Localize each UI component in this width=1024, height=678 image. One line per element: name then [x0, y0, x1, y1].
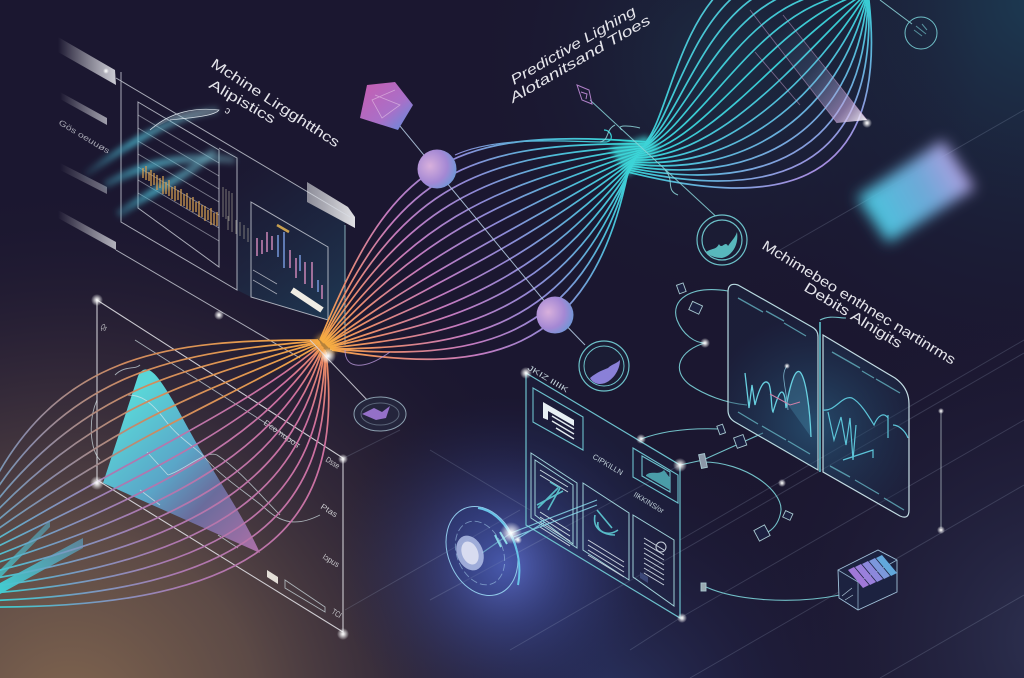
heading: machine analytics [206, 55, 343, 150]
panel: twin monitor screens [728, 284, 941, 528]
icon: server box [838, 550, 897, 610]
panel frames [116, 72, 350, 358]
cube captions: JKIZ IIIIK [526, 363, 570, 394]
cube captions: IIKKINS/or [632, 490, 666, 515]
orange candlestick chart [143, 166, 217, 226]
heading: data algorithms: Mchimebeo enthnec nartinrms [759, 237, 959, 368]
lower card three [633, 515, 674, 606]
cube captions [526, 363, 666, 515]
panel: isometric dashboard cube [526, 363, 680, 618]
right screen [823, 335, 909, 517]
vertical axis line [940, 411, 942, 528]
white legend swatch [267, 570, 278, 584]
heading: predictive lighting [505, 3, 653, 106]
panel: lower-left chart screen [91, 300, 343, 632]
panel annotations: Qs [99, 322, 109, 333]
glowing junction dots [90, 68, 945, 640]
circuit connectors [641, 290, 846, 600]
node spheres [418, 150, 574, 334]
cube captions: CIPKILLN [591, 452, 625, 477]
tinted right screen [237, 150, 345, 325]
icon: teal chart ring [697, 215, 747, 265]
top-left card [533, 388, 583, 450]
knot glows [315, 136, 660, 356]
screen divider [819, 322, 821, 472]
heading: predictive lighting: Alotanitsand Tloes [505, 12, 653, 106]
ellipse highlight [150, 109, 219, 130]
icon: purple disc [354, 397, 406, 431]
lower card one [531, 453, 577, 548]
small connector chips [676, 283, 793, 591]
small rotated caption: Gös oeuuøs [57, 118, 111, 156]
panel annotations: Dsse [324, 455, 342, 471]
right waveform [823, 398, 908, 460]
icon: top-right ring [905, 17, 937, 49]
header dashes [738, 298, 904, 510]
icon: purple chart ring [579, 341, 629, 391]
panel annotations [99, 322, 343, 620]
teal area chart [103, 369, 260, 553]
inner chart curves [91, 340, 325, 612]
panel annotations: Ptas [319, 502, 339, 519]
heading: machine analytics: Alipistics [206, 76, 279, 127]
connector lines and small squiggles [310, 0, 912, 403]
top-right card [633, 448, 678, 503]
wave bundle: central lobe [320, 130, 646, 359]
blurred colour card [857, 140, 975, 243]
heading: machine analytics: Mchine Lirgghtthcs [208, 55, 343, 150]
wave bundle: lower-left fan [0, 340, 329, 607]
heading: data algorithms: Debits Alnigits [801, 279, 905, 351]
grey tick columns [223, 187, 248, 242]
translucent wedge inside upper-right lobe [750, 10, 867, 123]
icon: diamond marker [577, 85, 592, 104]
teal bars at far left [0, 520, 83, 594]
panel: upper-left analytics screen [57, 37, 355, 358]
left screen [728, 284, 818, 470]
right candlestick chart [253, 225, 322, 310]
lower card two [583, 483, 629, 580]
panel frame [97, 300, 343, 632]
heading: machine analytics: ɔ [222, 105, 232, 117]
panel annotations: Dcomupos [262, 418, 301, 450]
light beam [482, 500, 597, 553]
cube frame [526, 373, 680, 618]
panel annotations: Iɔpus [321, 552, 341, 569]
panel annotations: TCI [330, 607, 343, 620]
heading: predictive lighting: Predictive Lighing [508, 3, 639, 88]
wave bundle: upper-right lobe [628, 0, 871, 188]
left waveform [745, 366, 811, 437]
header bars [58, 37, 355, 250]
teal light wisps [85, 110, 235, 215]
icon: pentagon gem [360, 82, 413, 130]
icon: optical lens [433, 496, 531, 606]
